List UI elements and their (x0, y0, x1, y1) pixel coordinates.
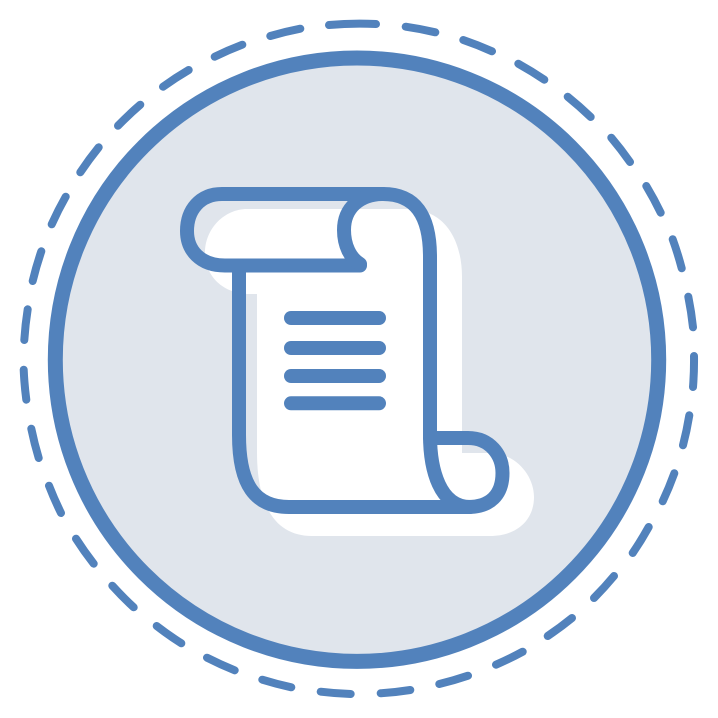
icon: text lines (291, 318, 379, 403)
icon: scroll outline (187, 194, 502, 507)
solid ring with grey disc (55, 58, 659, 661)
white scroll shadow (205, 209, 534, 536)
